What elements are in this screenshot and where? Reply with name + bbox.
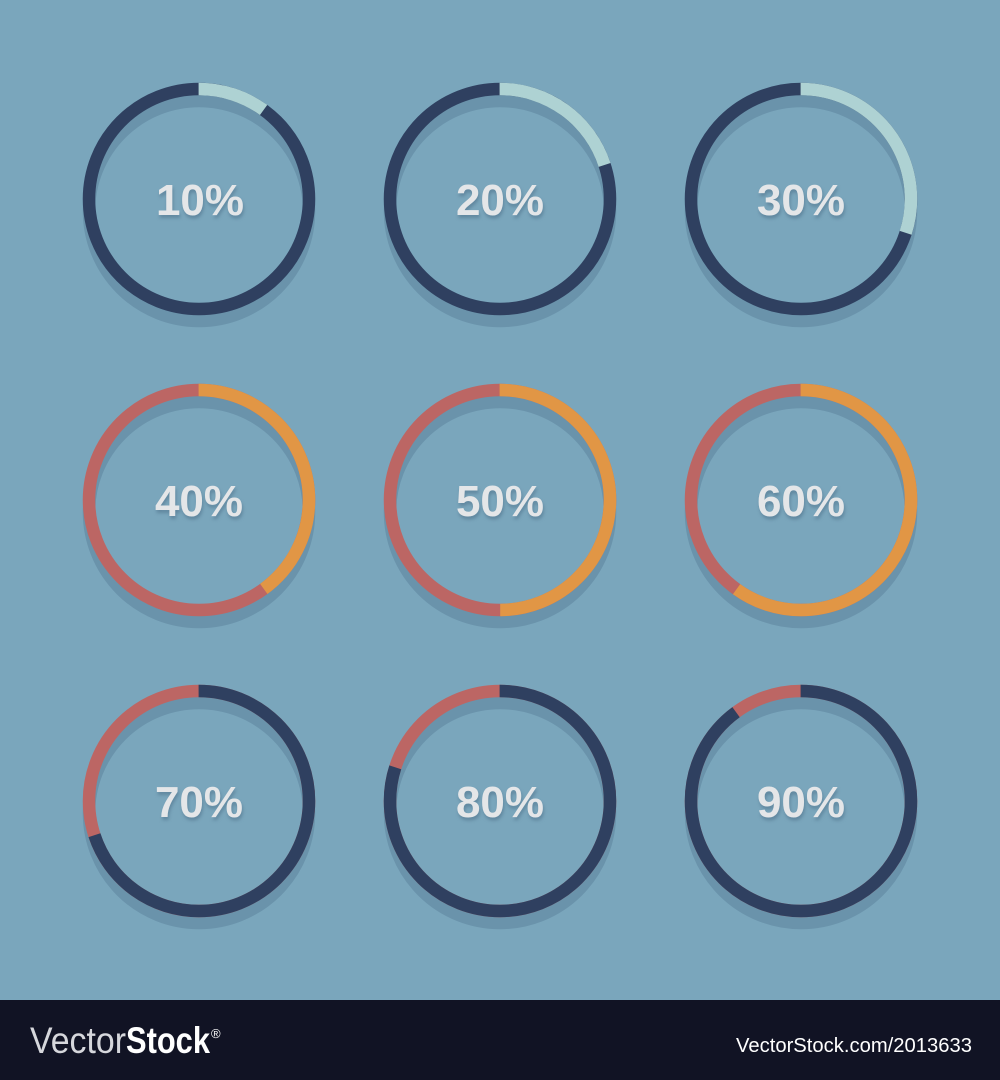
donut chart: 40%: 40% xyxy=(155,477,243,526)
footer logo: Stock xyxy=(126,1020,210,1061)
donut chart: 30% xyxy=(691,89,911,321)
donut chart: 10%: 10% xyxy=(156,176,244,225)
footer bar xyxy=(0,1000,1000,1080)
donut chart: 90% xyxy=(691,691,911,923)
donut chart: 20% xyxy=(390,89,610,321)
donut chart: 50% xyxy=(390,390,610,622)
donut chart: 40% xyxy=(89,390,309,622)
donut chart: 20%: 20% xyxy=(456,176,544,225)
donut chart: 80%: 80% xyxy=(456,778,544,827)
donut chart: 50%: 50% xyxy=(456,477,544,526)
footer url: VectorStock.com/2013633 xyxy=(736,1035,972,1057)
donut chart: 30%: 30% xyxy=(757,176,845,225)
footer registered mark: ® xyxy=(211,1026,221,1041)
donut chart: 80% xyxy=(390,691,610,923)
donut chart: 70% xyxy=(89,691,309,923)
donut chart: 70%: 70% xyxy=(155,778,243,827)
donut chart: 60%: 60% xyxy=(757,477,845,526)
donut chart: 90%: 90% xyxy=(757,778,845,827)
donut chart: 10% xyxy=(89,89,309,321)
footer logo: Vector xyxy=(30,1020,126,1061)
donut chart: 60% xyxy=(691,390,911,622)
